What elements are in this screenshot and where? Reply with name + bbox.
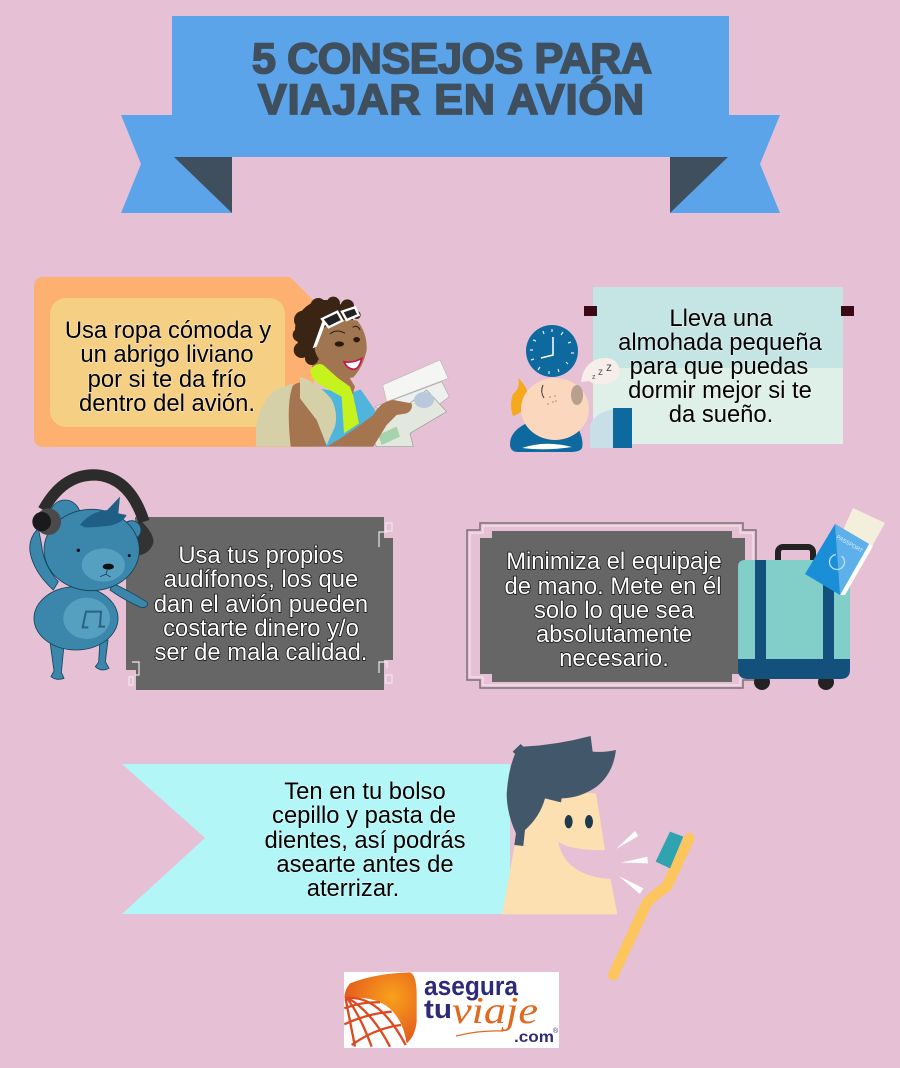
text: tip 3: Usa tus propios [178,542,344,569]
icon: speech bubble with z z z [581,358,620,384]
panel: tip 3 headphones [126,517,393,690]
text: tip 5 [264,778,466,902]
logo: asegura tu viaje: tu [424,994,452,1024]
text: tip 1: por si te da frío [88,366,246,393]
text: tip 4: necesario. [559,645,669,672]
text: tip 2: Lleva una [669,305,773,332]
text: tip 5: dientes, así podrás [264,827,466,854]
text: tip 3: ser de mala calidad. [155,639,367,666]
icon: woman reading a map [256,297,449,447]
logo: asegura tu viaje: asegura [424,971,519,1001]
text: tip 5: Ten en tu bolso [284,778,446,805]
icon: headphones [32,475,144,535]
text: tip 3: costarte dinero y/o [163,615,359,642]
icon: suitcase and passport [738,508,885,690]
icon: clock [526,325,578,377]
woman: afro hair [293,297,361,365]
title: 5 CONSEJOS PARA [252,35,652,83]
panel: tip 4 luggage [467,523,756,688]
text: tip 3 [154,542,368,666]
icon: ticket [825,508,885,595]
text: tip 4: de mano. Mete en él [505,573,721,600]
text: tip 1 [65,317,271,417]
text: tip 4: solo lo que sea [534,597,695,624]
panel: tip 2 pillow [584,287,854,444]
icon: passport [805,524,869,595]
logo: asegura tu viaje [344,971,559,1048]
icon: speech bubble with z z z: z [606,360,612,374]
text: tip 5: asearte antes de [276,851,454,878]
text: tip 2 [618,305,823,428]
text: tip 3: audífonos, los que [164,566,358,593]
logo: asegura tu viaje: .com [514,1029,554,1046]
text: tip 4: Minimiza el equipaje [506,548,722,575]
text: tip 4 [505,548,722,672]
title [252,35,652,124]
icon: speech bubble with z z z: z [592,374,596,381]
text: tip 1: un abrigo liviano [80,341,254,368]
logo: asegura tu viaje: viaje [452,990,538,1032]
icon: toothbrush [613,832,689,975]
text: tip 1: Usa ropa cómoda y [65,317,271,344]
panel: tip 5 toothbrush [122,764,510,914]
text: tip 4: absolutamente [536,621,692,648]
title: VIAJAR EN AVIÓN [258,75,644,124]
text: tip 2: da sueño. [669,401,773,428]
text: tip 3: dan el avión pueden [154,591,368,618]
text: tip 5: cepillo y pasta de [272,802,456,829]
icon: blue bear with headphones [30,475,153,679]
icon: sleeping person with clock [510,325,632,452]
text: tip 1: dentro del avión. [79,390,255,417]
text: tip 2: para que puedas [630,353,808,380]
icon: passport: PASSPORT [835,535,864,555]
icon: speech bubble with z z z: z [598,367,603,378]
title banner [121,16,780,213]
text: tip 5: aterrizar. [307,875,399,902]
icon: man brushing teeth [502,736,689,975]
text: tip 2: almohada pequeña [618,329,823,356]
logo: asegura tu viaje: ® [553,1027,559,1035]
text: tip 2: dormir mejor si te [628,377,812,404]
panel: tip 1 clothing [34,277,314,447]
